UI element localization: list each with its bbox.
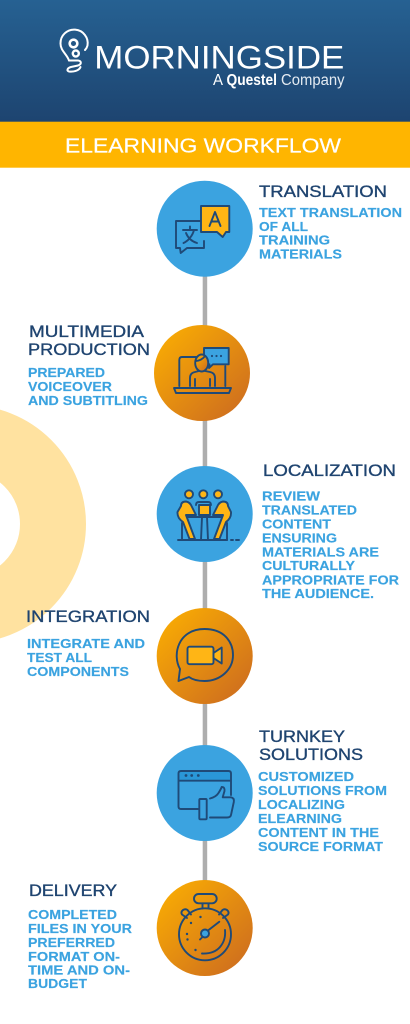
text: localization: THE AUDIENCE. [262, 587, 374, 601]
timeline connectors [203, 270, 207, 887]
logo tagline: Company [281, 72, 345, 89]
text: localization [262, 490, 399, 601]
text: multimedia production: AND SUBTITLING [28, 394, 148, 408]
text: translation: TRAINING [259, 234, 330, 248]
logo tagline: A [213, 72, 224, 89]
text: localization: TRANSLATED [262, 504, 357, 518]
text: localization: CULTURALLY [262, 559, 356, 573]
text: integration: TEST ALL [27, 651, 92, 665]
text: translation: MATERIALS [259, 248, 342, 262]
text: turnkey solutions: SOURCE FORMAT [258, 840, 383, 854]
icon: logo light bulb [60, 30, 88, 72]
heading: multimedia production: MULTIMEDIA [29, 323, 144, 341]
text: delivery: FORMAT ON- [28, 950, 120, 964]
text: localization: REVIEW [262, 490, 320, 504]
logo tagline: Questel [226, 72, 277, 89]
heading: integration: INTEGRATION [26, 608, 150, 626]
text: integration: COMPONENTS [27, 665, 129, 679]
text: multimedia production [28, 366, 148, 408]
heading: multimedia production [28, 323, 150, 359]
text: delivery: BUDGET [28, 977, 87, 991]
text: localization: MATERIALS ARE [262, 545, 379, 559]
text: localization: APPROPRIATE FOR [262, 573, 399, 587]
text: turnkey solutions: CONTENT IN THE [258, 826, 379, 840]
heading: translation: TRANSLATION [259, 183, 387, 201]
icon: meeting at table [157, 466, 253, 562]
text: delivery: COMPLETED [28, 908, 117, 922]
text: multimedia production: PREPARED [28, 366, 105, 380]
icon: browser with thumbs up [157, 745, 253, 841]
text: turnkey solutions: LOCALIZING [258, 798, 345, 812]
logo wordmark: MORNINGSIDE [94, 39, 344, 75]
logo tagline [213, 72, 345, 89]
heading: localization: LOCALIZATION [263, 462, 396, 480]
text: translation: OF ALL [259, 220, 308, 234]
heading: turnkey solutions: SOLUTIONS [259, 746, 363, 764]
text: turnkey solutions: CUSTOMIZED [258, 770, 354, 784]
decorative ring [0, 438, 53, 610]
step: integration [26, 608, 253, 704]
step: multimedia production [28, 323, 250, 421]
heading: turnkey solutions [259, 728, 363, 764]
heading: multimedia production: PRODUCTION [28, 341, 150, 359]
text: delivery [28, 908, 132, 991]
text: multimedia production: VOICEOVER [28, 380, 112, 394]
text: integration [27, 637, 145, 679]
text: delivery: PREFERRED [28, 936, 115, 950]
heading: turnkey solutions: TURNKEY [259, 728, 345, 746]
step: turnkey solutions [157, 728, 387, 854]
icon: stopwatch [157, 880, 253, 976]
text: turnkey solutions: ELEARNING [258, 812, 342, 826]
heading: delivery: DELIVERY [29, 882, 117, 900]
icon: video chat bubble [157, 608, 253, 704]
icon: translation [157, 181, 253, 277]
title band [0, 122, 410, 168]
text: localization: ENSURING [262, 531, 337, 545]
step: delivery [28, 880, 253, 991]
text: localization: CONTENT [262, 517, 331, 531]
text: translation: TEXT TRANSLATION [259, 206, 402, 220]
text: turnkey solutions [258, 770, 387, 854]
text: integration: INTEGRATE AND [27, 637, 145, 651]
text: translation [259, 206, 402, 262]
text: delivery: TIME AND ON- [28, 964, 130, 978]
icon: presenter on laptop [154, 325, 250, 421]
step: localization [157, 462, 399, 601]
text: delivery: FILES IN YOUR [28, 922, 132, 936]
text: turnkey solutions: SOLUTIONS FROM [258, 784, 387, 798]
step: translation [157, 181, 402, 277]
title: ELEARNING WORKFLOW [65, 135, 341, 157]
header banner [0, 0, 410, 122]
